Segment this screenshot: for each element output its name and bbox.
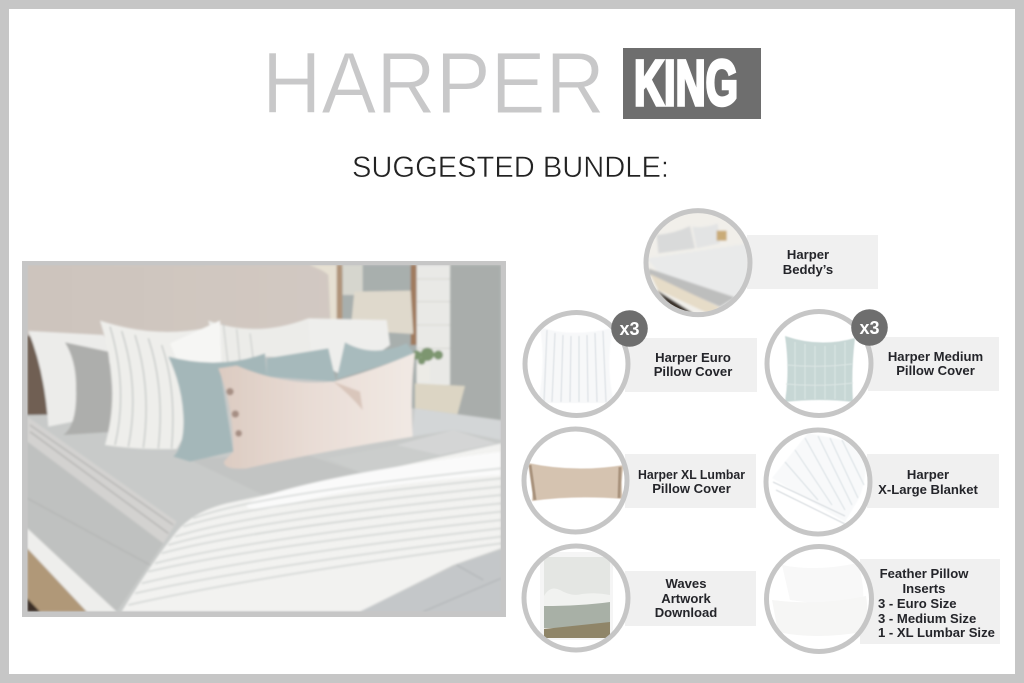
- badge: x3: [851, 309, 888, 346]
- item: Feather Pillow Inserts: 1 - XL Lumbar Size: [878, 625, 995, 640]
- badge: x3: x3: [619, 319, 640, 339]
- icon: folded blanket: [772, 433, 866, 524]
- item: Harper Euro Pillow Cover: Harper Euro: [655, 350, 731, 365]
- subtitle: SUGGESTED BUNDLE:: [352, 151, 669, 184]
- item: Harper Medium Pillow Cover: [767, 309, 999, 416]
- icon: striped euro pillow: [538, 327, 614, 403]
- icon: waves artwork: [540, 552, 613, 640]
- item: Feather Pillow Inserts: Inserts: [903, 581, 945, 596]
- item: Waves Artwork Download: Artwork: [661, 591, 711, 606]
- item: Feather Pillow Inserts: 3 - Euro Size: [878, 596, 957, 611]
- ring: artwork: [524, 546, 628, 650]
- item: Harper Beddy's: Harper: [787, 247, 829, 262]
- item: Harper Euro Pillow Cover: [525, 310, 757, 416]
- item: Harper Euro Pillow Cover: Pillow Cover: [654, 364, 732, 379]
- ring: medium pillow: [767, 312, 871, 416]
- icon: lumbar pillow: [528, 463, 624, 501]
- ring: inserts: [766, 546, 872, 652]
- ring: blanket: [766, 430, 870, 534]
- ring: lumbar pillow: [524, 429, 627, 532]
- panel: bed photo: [22, 261, 506, 617]
- ring: euro pillow: [525, 312, 628, 416]
- item: Harper Beddy's: Beddy’s: [783, 262, 833, 277]
- icon: quilted medium pillow: [785, 336, 855, 402]
- item: Waves Artwork Download: Download: [655, 605, 717, 620]
- item: Waves Artwork Download: Waves: [665, 576, 707, 591]
- item: Harper X-Large Blanket: X-Large Blanket: [878, 482, 978, 497]
- item: Harper Medium Pillow Cover: Harper Medium: [888, 349, 983, 364]
- badge: x3: [611, 310, 648, 347]
- title: HARPER: HARPER: [262, 35, 605, 132]
- icon: white pillow inserts: [772, 596, 867, 636]
- item: Harper XL Lumbar Pillow Cover: Pillow Cover: [652, 481, 731, 496]
- item: Waves Artwork Download: [524, 546, 756, 650]
- badge: x3: x3: [859, 318, 880, 338]
- item: Harper Medium Pillow Cover: Pillow Cover: [896, 363, 975, 378]
- item: Harper X-Large Blanket: [766, 430, 999, 534]
- item: Harper XL Lumbar Pillow Cover: Harper XL Lumbar: [638, 467, 745, 482]
- item: Harper Beddy's: [643, 208, 878, 318]
- item: Harper XL Lumbar Pillow Cover: [524, 429, 756, 532]
- item: Feather Pillow Inserts: [766, 546, 1000, 652]
- title badge: KING: KING: [634, 47, 738, 119]
- item: Harper X-Large Blanket: Harper: [907, 467, 949, 482]
- item: Feather Pillow Inserts: Feather Pillow: [880, 566, 969, 581]
- item: Feather Pillow Inserts: 3 - Medium Size: [878, 611, 976, 626]
